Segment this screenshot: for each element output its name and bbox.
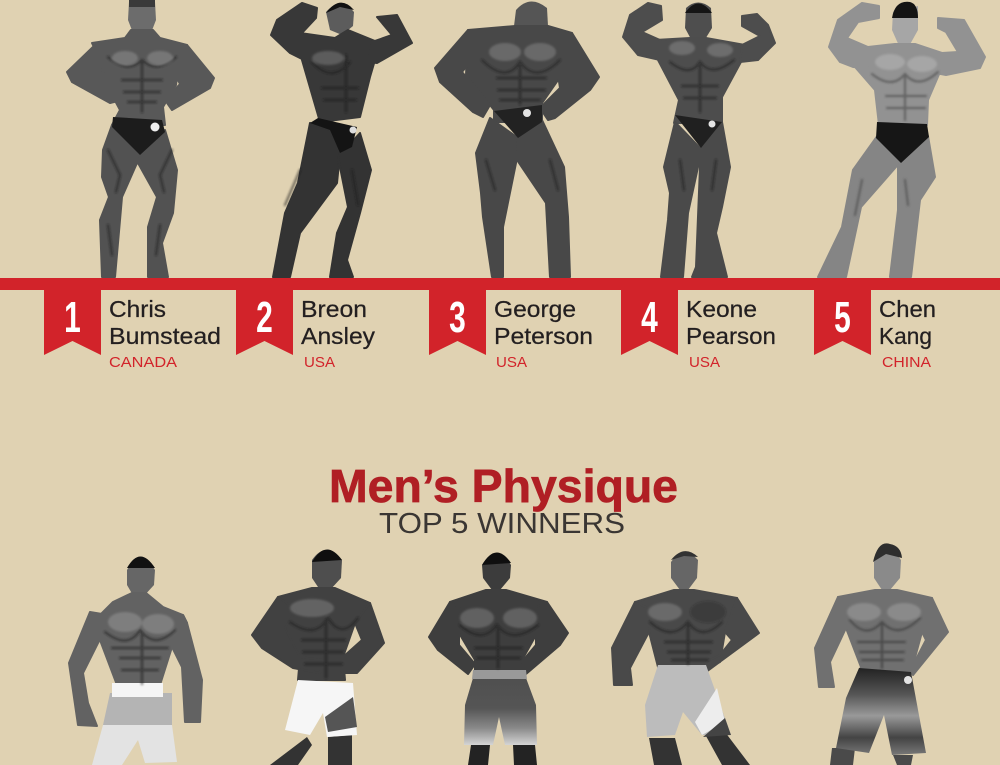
country: USA bbox=[304, 354, 335, 371]
name: Peterson bbox=[494, 323, 593, 349]
number 3: 3 bbox=[449, 292, 466, 341]
figure: Breon Ansley bbox=[271, 3, 412, 277]
physique figure 3 bbox=[429, 552, 568, 765]
number 4: 4 bbox=[641, 292, 658, 341]
figure: George Peterson bbox=[435, 1, 599, 277]
ribbon 3 bbox=[429, 290, 486, 355]
name: Ansley bbox=[301, 323, 376, 349]
physique figure 4 bbox=[612, 551, 759, 765]
entry: 3 George Peterson bbox=[429, 290, 593, 371]
ribbon 2 bbox=[236, 290, 293, 355]
physique figure 1 bbox=[69, 556, 202, 765]
number 1: 1 bbox=[64, 292, 81, 341]
name: Chen bbox=[879, 296, 936, 322]
figure: Keone Pearson bbox=[623, 2, 775, 277]
name: Breon bbox=[301, 296, 367, 322]
country: CANADA bbox=[109, 354, 177, 371]
country: USA bbox=[496, 354, 527, 371]
entry: 5 Chen Kang bbox=[814, 290, 936, 371]
ribbon 1 bbox=[44, 290, 101, 355]
name: Pearson bbox=[686, 323, 776, 349]
figure: Chen Kang bbox=[818, 2, 985, 277]
physique figure 5 bbox=[815, 543, 948, 765]
name: Kang bbox=[879, 323, 932, 349]
country: CHINA bbox=[882, 354, 931, 371]
number 5: 5 bbox=[834, 292, 851, 341]
red bar bbox=[0, 278, 1000, 290]
name: Chris bbox=[109, 296, 166, 322]
entry: 1 Chris Bumstead bbox=[44, 290, 221, 371]
name: Bumstead bbox=[109, 323, 221, 349]
country: USA bbox=[689, 354, 720, 371]
title: Men’s Physique bbox=[329, 460, 678, 512]
entry: 4 Keone Pearson bbox=[621, 290, 776, 371]
physique figure 2 bbox=[252, 549, 384, 765]
number 2: 2 bbox=[256, 292, 273, 341]
ribbon 4 bbox=[621, 290, 678, 355]
name: George bbox=[494, 296, 576, 322]
entry: 2 Breon Ansley bbox=[236, 290, 376, 371]
ribbon 5 bbox=[814, 290, 871, 355]
name: Keone bbox=[686, 296, 757, 322]
figure: Chris Bumstead bbox=[67, 0, 214, 277]
subtitle: TOP 5 WINNERS bbox=[379, 508, 625, 540]
